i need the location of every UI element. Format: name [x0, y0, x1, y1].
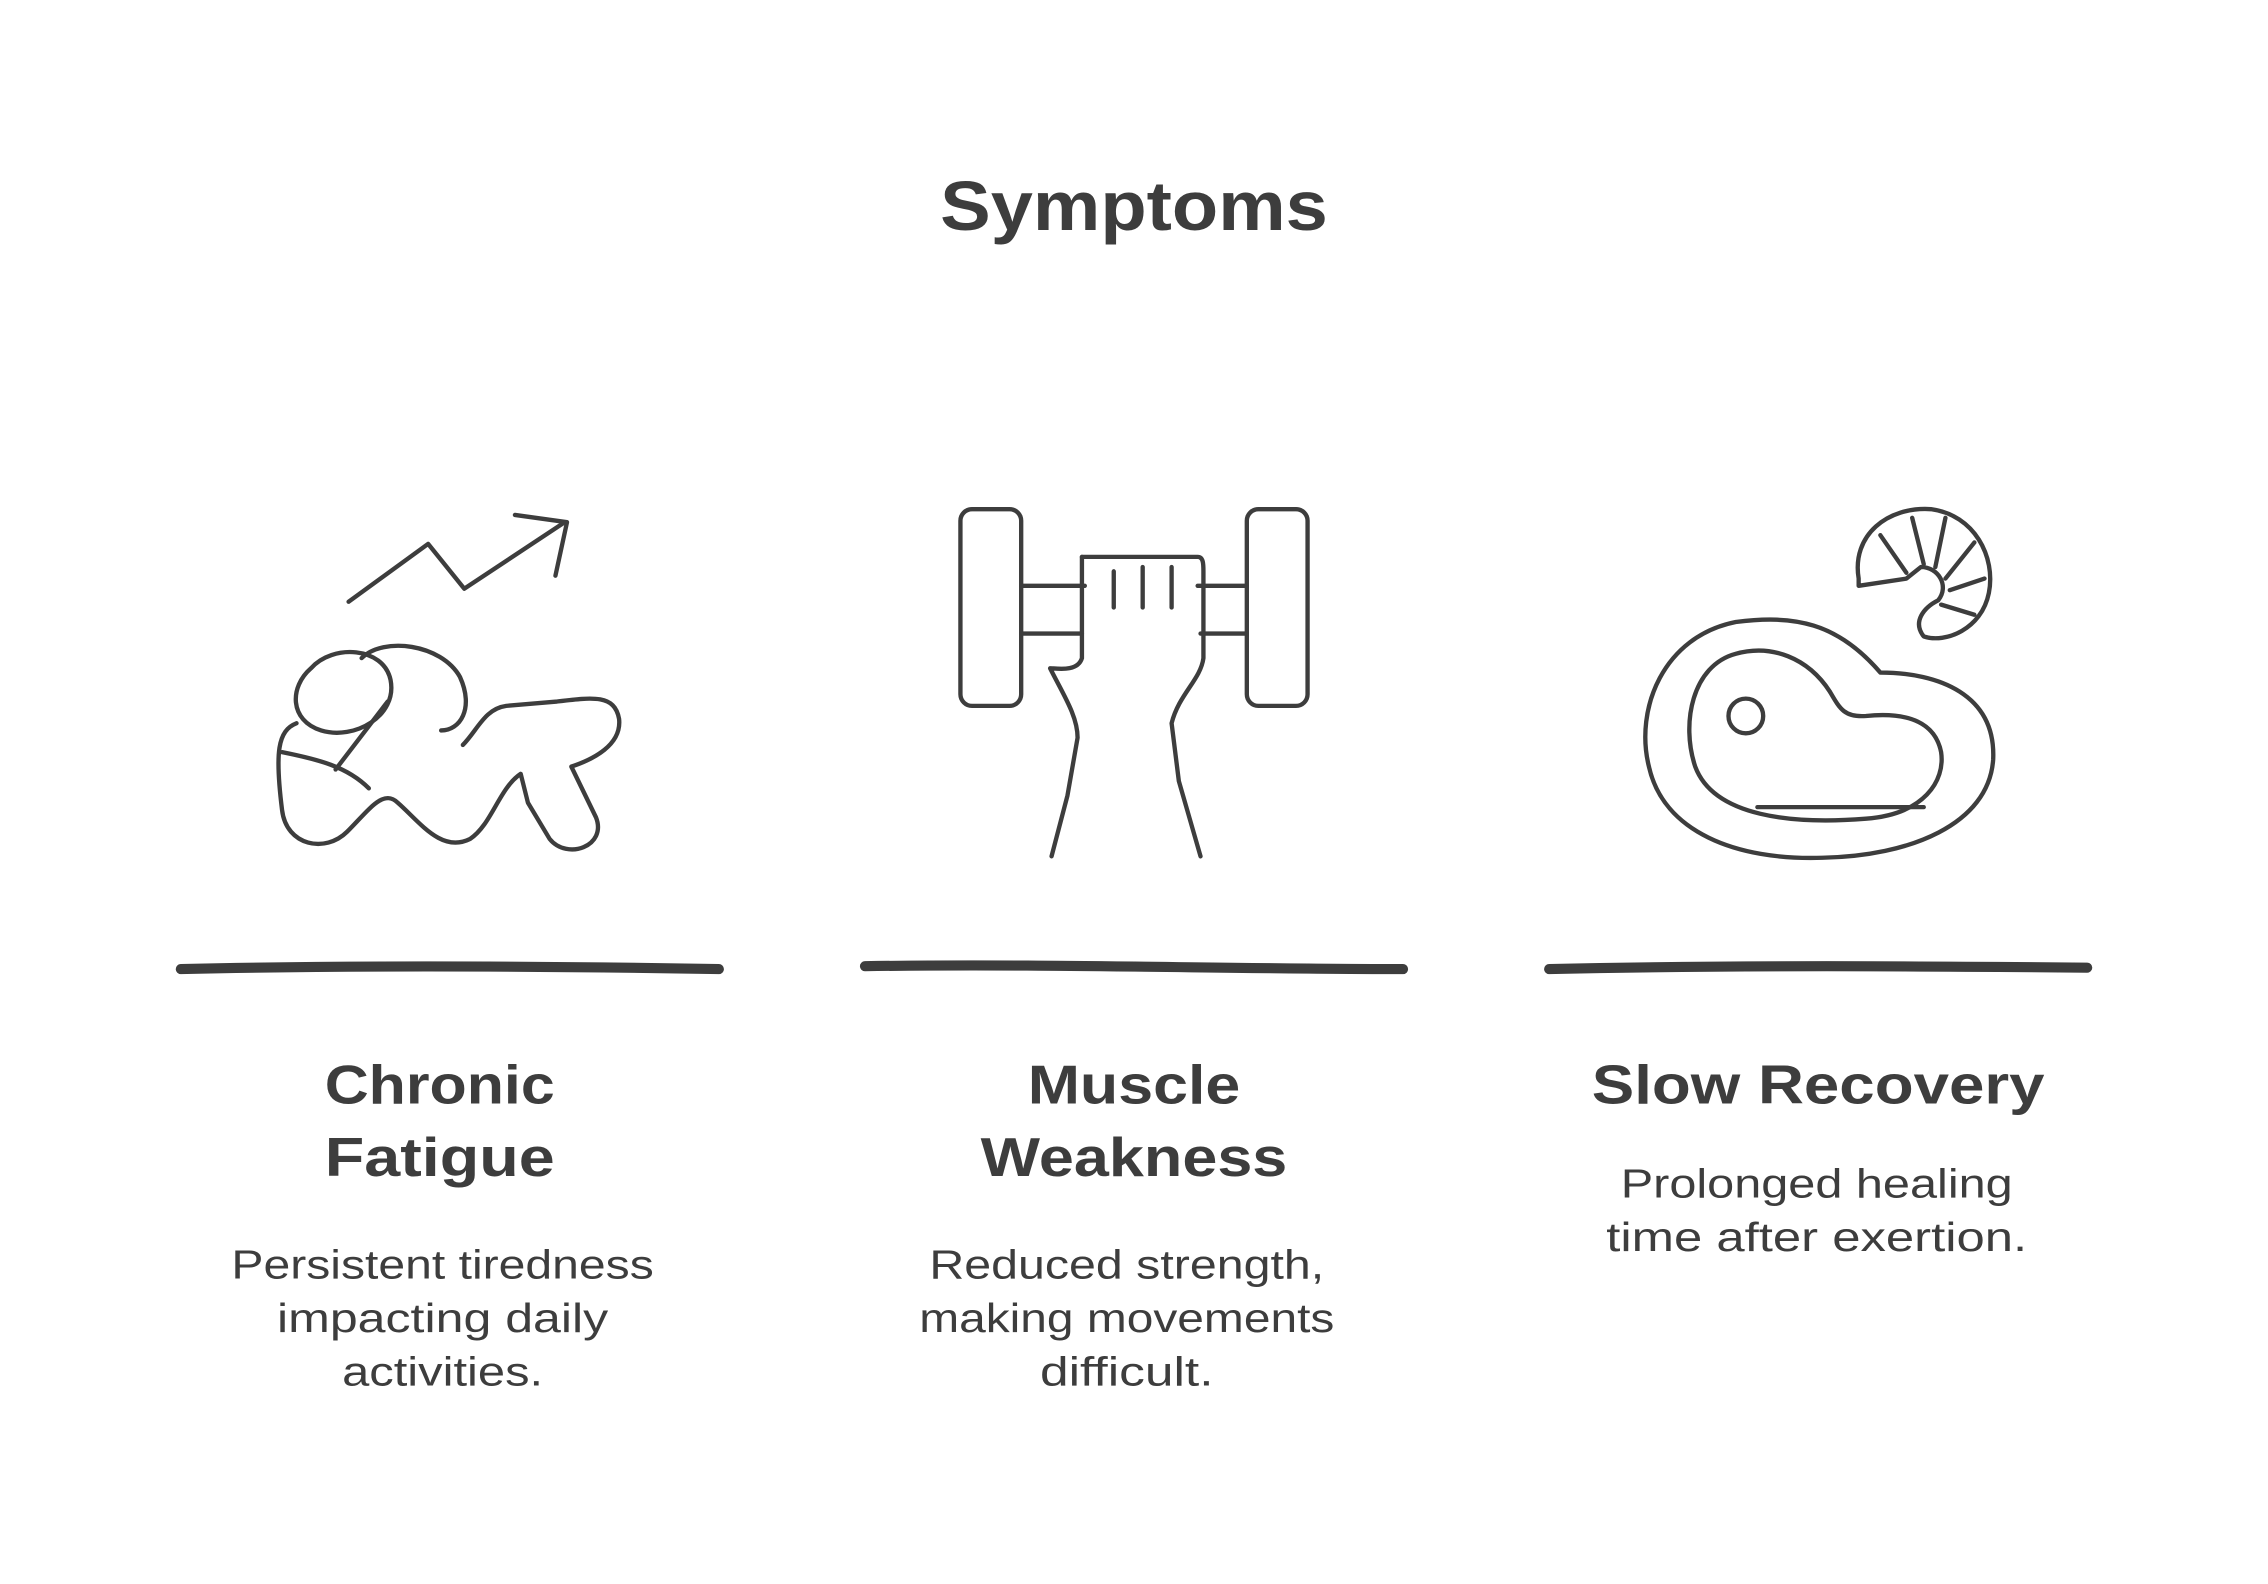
- description: Persistent tiredness: [231, 1242, 654, 1288]
- description: Reduced strength,: [929, 1242, 1324, 1288]
- divider line: [865, 965, 1403, 969]
- divider line: [181, 966, 719, 969]
- icon: tired person with rising arrow: [278, 515, 619, 849]
- icon: steak and curl: [1645, 509, 1993, 858]
- description: Prolonged healing: [1621, 1161, 2013, 1207]
- description: activities.: [342, 1349, 543, 1395]
- divider line: [1549, 966, 2087, 969]
- description: making movements: [919, 1295, 1334, 1341]
- heading: Weakness: [981, 1126, 1287, 1188]
- heading: Muscle: [1028, 1054, 1240, 1116]
- description: difficult.: [1040, 1349, 1214, 1395]
- heading: Fatigue: [325, 1126, 555, 1188]
- title: Symptoms: [940, 167, 1328, 245]
- panel: slow recovery: [1549, 509, 2087, 1260]
- description: time after exertion.: [1606, 1214, 2027, 1260]
- panel: chronic fatigue: [181, 515, 719, 1395]
- heading: Slow Recovery: [1592, 1054, 2045, 1116]
- description: impacting daily: [277, 1295, 609, 1341]
- icon: hand holding dumbbell: [960, 509, 1308, 856]
- panel: muscle weakness: [865, 509, 1403, 1395]
- heading: Chronic: [325, 1054, 555, 1116]
